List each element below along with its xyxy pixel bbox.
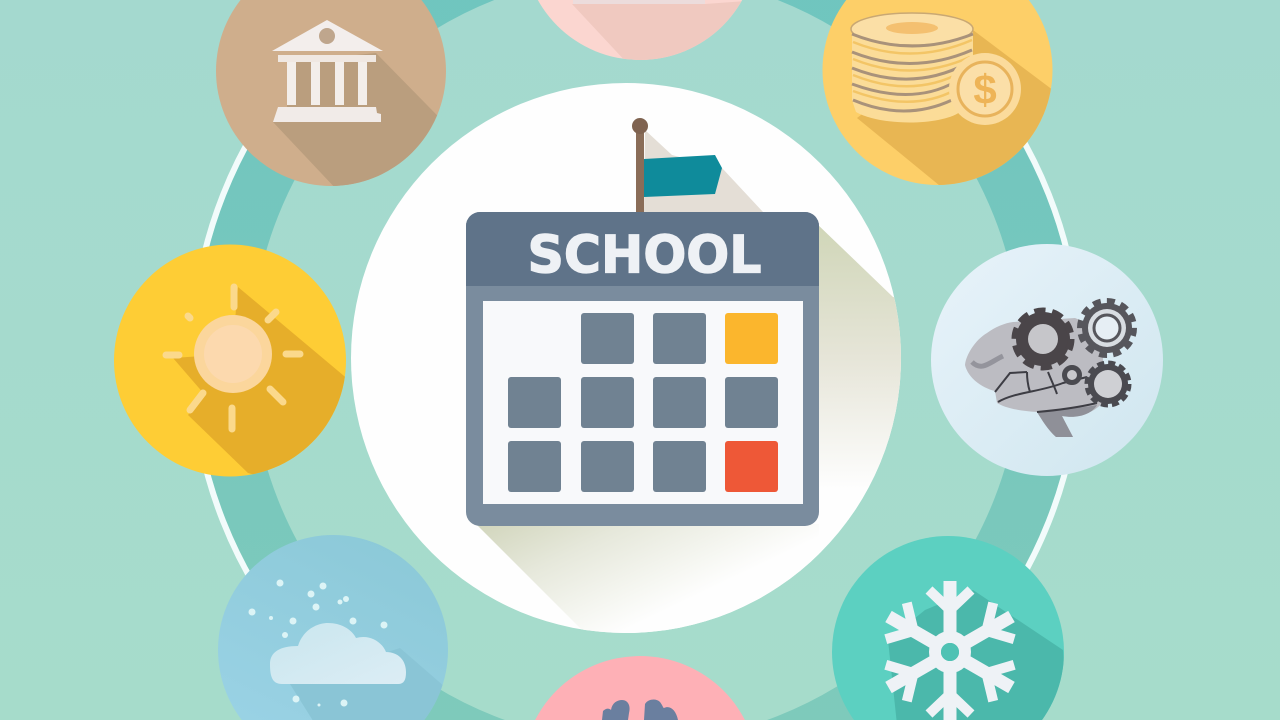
lower right gear [1088,364,1128,404]
panel: school calendar [466,118,819,526]
icon: bottom pink circle [522,656,758,720]
brain [965,318,1105,437]
icon: cloud and snow circle [218,535,460,720]
calendar page [483,301,803,504]
flag shadow [644,130,763,212]
flag [644,155,722,197]
large gear [1016,312,1070,366]
icon: bank circle [216,0,446,186]
calendar long shadow: right [819,226,901,520]
calendar long shadow: bottom [478,526,819,633]
icon: sun circle [114,244,350,490]
icon: brain and gears circle [931,244,1163,476]
icon: snowflake circle [832,536,1075,720]
flag pole [632,118,648,213]
icon: coins circle [822,0,1052,185]
center white circle [351,83,915,660]
calendar body [466,212,819,526]
ring: teal band [223,0,1049,720]
calendar day squares [508,313,778,492]
ring: outer white line [192,0,1080,720]
calendar header [466,212,819,286]
top right gear [1082,303,1132,353]
icon: coins circle: $ [973,66,997,113]
icon: top pink circle [538,0,742,60]
heading: SCHOOL: SCHOOL [528,226,762,286]
small gear [1064,368,1080,382]
